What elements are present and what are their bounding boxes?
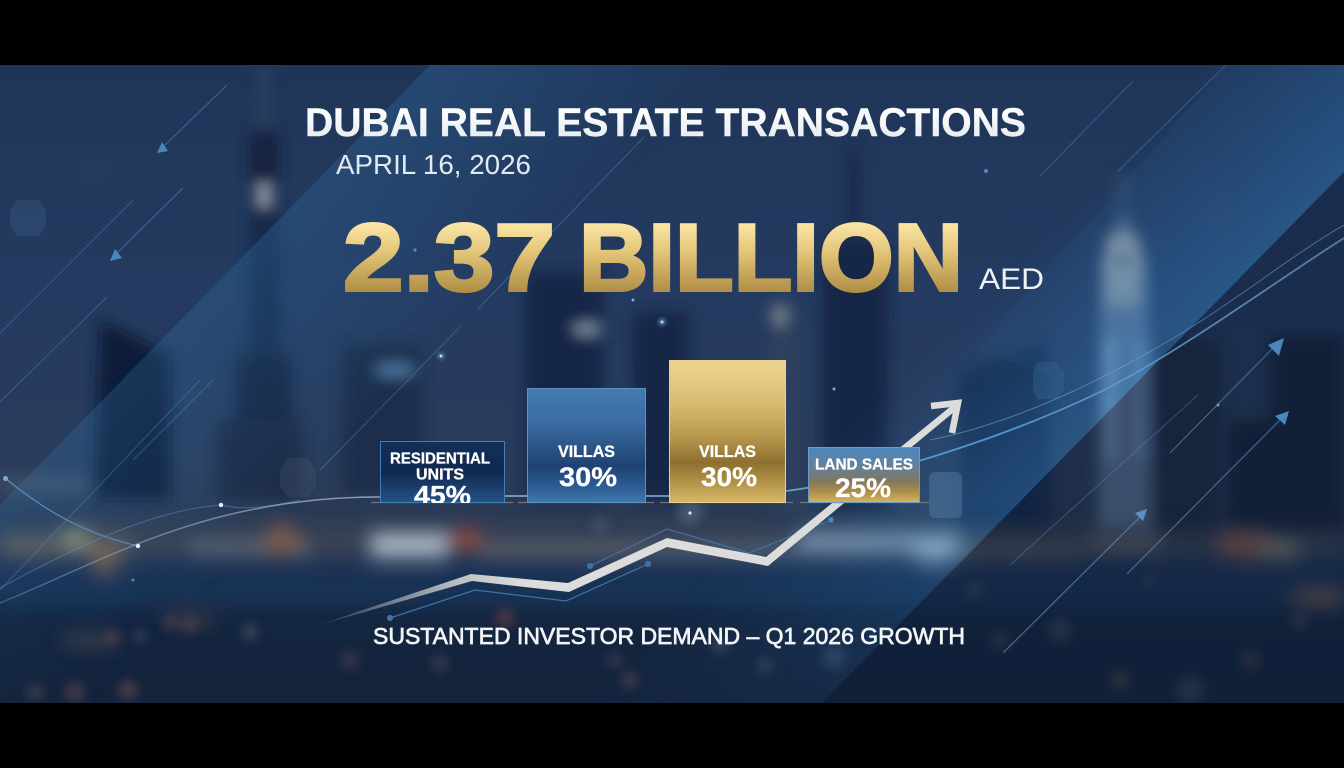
left connecting curves with nodes (0, 476, 380, 603)
right diagonal light band (734, 65, 1344, 703)
bar: residential units 45% (380, 442, 504, 510)
small star dots (413, 169, 1219, 515)
headline figure: BILLION (579, 204, 963, 312)
right sweeping blue curves (505, 225, 1344, 496)
bar: residential units 45%: 45% (414, 480, 471, 510)
currency label: AED (979, 263, 1044, 296)
bottom tagline: SUSTANTED INVESTOR DEMAND – Q1 2026 GROWTH (373, 623, 965, 649)
blurred city lights (0, 478, 1344, 647)
bar: villas 30% gold (670, 360, 786, 502)
bar: villas 30% blue: VILLAS (558, 443, 615, 461)
arrows pointing up-right (1003, 338, 1289, 653)
bar: land sales 25% (808, 448, 920, 503)
bar: villas 30% blue: 30% (559, 462, 617, 492)
bar: residential units 45%: UNITS (416, 466, 464, 484)
bar: land sales 25%: LAND SALES (815, 456, 913, 474)
translucent hexagon bokeh shapes (10, 150, 1240, 518)
bokeh lights (26, 499, 1310, 704)
bar: villas 30% blue (528, 388, 646, 502)
dark lower-right wedge (914, 172, 1344, 703)
bar baseline (371, 502, 929, 504)
date: APRIL 16, 2026 (336, 149, 531, 180)
white rising trend arrow (309, 402, 960, 628)
thin diagonal accent lines (0, 64, 1227, 590)
bar: residential units 45%: RESIDENTIAL (390, 450, 490, 468)
blurred skyline (95, 65, 1344, 540)
upper right faint wedge (1118, 276, 1126, 290)
title: DUBAI REAL ESTATE TRANSACTIONS (305, 101, 1026, 145)
arrows pointing down-left (110, 85, 227, 261)
headline figure: 2.37 (343, 204, 555, 312)
left diagonal light band (0, 65, 639, 606)
headline figure (343, 204, 963, 312)
bar: villas 30% gold: VILLAS (699, 443, 756, 461)
thin blue trend lines with nodes (388, 518, 834, 620)
bar: land sales 25%: 25% (835, 473, 891, 503)
bar: villas 30% gold: 30% (701, 462, 757, 492)
